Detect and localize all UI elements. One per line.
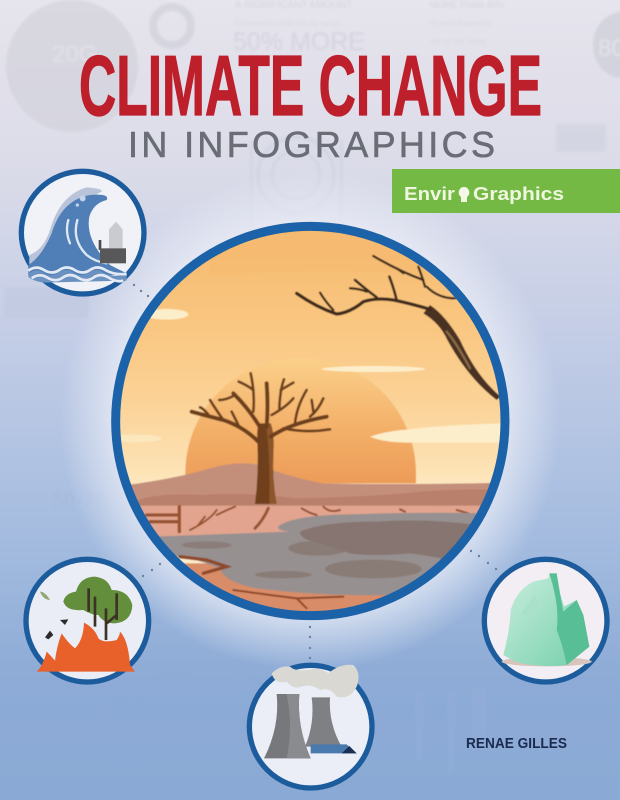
- faint background infographic elements: Emissions could rise by up to: [235, 19, 339, 28]
- icon circle: power plant: [249, 665, 372, 788]
- glow behind main circle: [60, 171, 560, 671]
- lower ground: [184, 562, 388, 612]
- darker sky band: [210, 236, 485, 280]
- circle: [21, 171, 144, 294]
- faint background infographic elements: 10%: [235, 655, 275, 677]
- building: [311, 744, 357, 753]
- icon circle: wildfire: [26, 559, 149, 682]
- tree trunks: [89, 588, 117, 640]
- ground cracks: [147, 507, 468, 532]
- distant dead tree: [192, 373, 330, 504]
- series banner: Graphics: [473, 184, 564, 204]
- icon: light bulb: [459, 187, 469, 202]
- foreground branch: [297, 256, 501, 400]
- circle: [26, 559, 149, 682]
- faint background infographic elements: 50-7A: [52, 489, 109, 512]
- subtitle: IN INFOGRAPHICS: [128, 124, 495, 165]
- flames: [37, 623, 135, 672]
- water lines: [28, 270, 127, 283]
- circle: [484, 559, 607, 682]
- main circular illustration: drought landscape: [108, 220, 510, 620]
- lower cracks: [180, 557, 343, 608]
- series banner: Envir: [404, 184, 455, 204]
- author name: RENAE GILLES: [466, 736, 567, 752]
- front cooling tower: [264, 694, 311, 758]
- tree foliage: [63, 577, 132, 623]
- series banner: [392, 169, 620, 213]
- pond mud patches: [182, 521, 477, 578]
- wave foam: [67, 220, 107, 263]
- smoke: [272, 665, 359, 697]
- connector dots: [133, 284, 497, 659]
- pond: [153, 513, 487, 595]
- icon circle: melting iceberg: [484, 559, 607, 682]
- ground shadow: [502, 657, 592, 666]
- faint background infographic elements: are at risk today: [430, 37, 487, 46]
- far hills: [131, 463, 490, 501]
- sun: [185, 358, 416, 483]
- sky: [120, 230, 500, 564]
- clouds: [108, 309, 503, 443]
- icon circle: tsunami wave: [21, 171, 144, 294]
- faint background infographic elements: A SIGNIFICANT AMOUNT: [235, 0, 353, 11]
- embers and leaf: [40, 592, 68, 639]
- wave: [29, 187, 110, 275]
- circle: [249, 665, 372, 788]
- main circle ring: [116, 226, 505, 616]
- iceberg: [503, 573, 589, 666]
- faint background infographic elements: MORE THAN 40%: [430, 0, 504, 10]
- cracked ground: [140, 505, 480, 537]
- building: [99, 222, 126, 263]
- faint background infographic elements: 20G: [52, 41, 97, 68]
- faint background infographic elements: 50% MORE: [233, 28, 365, 56]
- faint background infographic elements: of animal species: [430, 19, 492, 28]
- back cooling tower: [305, 697, 342, 747]
